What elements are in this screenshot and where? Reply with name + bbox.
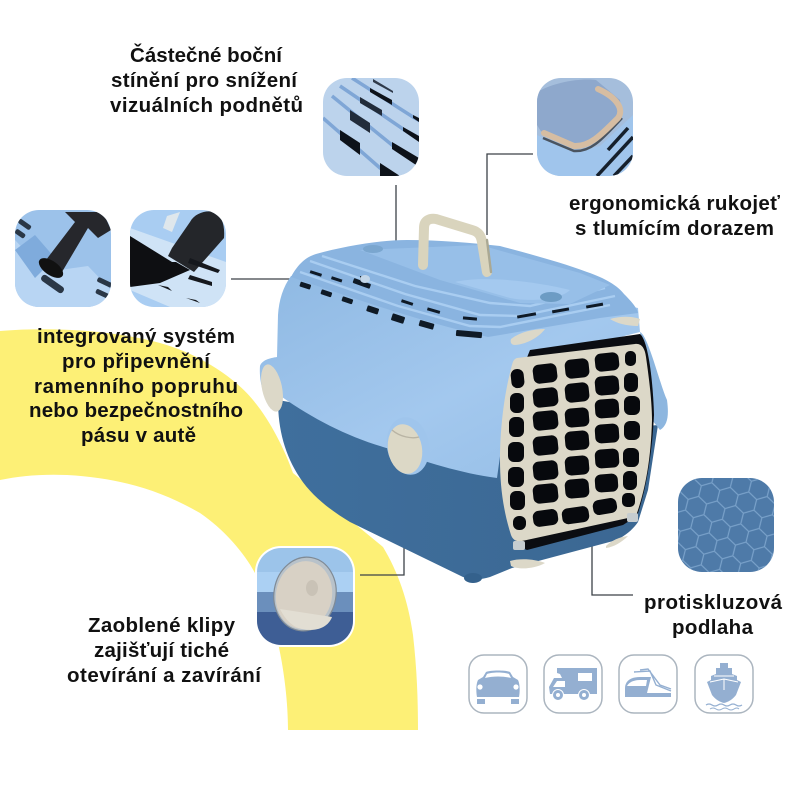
text: anti-slip floor: podlaha	[672, 616, 754, 639]
text: side shading	[110, 43, 303, 117]
text: anti-slip floor: protiskluzová	[644, 591, 783, 614]
text: integrated strap system: pásu v autě	[81, 424, 196, 447]
thumbnail: anti-slip floor	[678, 478, 774, 572]
front side clip	[382, 414, 434, 478]
text: ergonomic handle	[569, 192, 780, 240]
transport icon: camper	[544, 655, 602, 713]
thumbnail: strap through lid	[14, 210, 113, 307]
text: ergonomic handle: s tlumícím dorazem	[575, 217, 774, 240]
connector lines	[231, 154, 633, 595]
text: side shading: vizuálních podnětů	[110, 94, 303, 117]
thumbnail: strap over slots	[130, 210, 226, 307]
top strap clip	[360, 275, 370, 283]
yellow background arc	[0, 329, 418, 730]
transport icon: car	[469, 655, 527, 713]
lid ridges	[300, 256, 615, 327]
slots	[340, 79, 419, 177]
text: integrated strap system: pro připevnění	[62, 350, 211, 373]
text: integrated strap system: integrovaný systém	[37, 325, 235, 348]
door hinge tabs	[510, 317, 640, 568]
door opening	[510, 334, 654, 550]
text: anti-slip floor	[644, 591, 783, 639]
thumbnail: rounded clip	[255, 546, 355, 647]
text: side shading: Částečné boční	[130, 43, 283, 67]
thumbnail: handle	[537, 78, 633, 176]
thumbnail: side shading	[323, 78, 422, 178]
lid top surface	[291, 240, 638, 337]
door frame side	[640, 332, 668, 430]
text: rounded clips	[67, 614, 262, 687]
transport icon: ship	[695, 655, 753, 713]
text: rounded clips: Zaoblené klipy	[88, 614, 236, 637]
pet carrier	[257, 219, 668, 583]
transport icon: train	[619, 655, 677, 713]
vent rings	[540, 292, 562, 302]
carrier base	[278, 400, 658, 579]
text: integrated strap system: ramenního popruhu	[34, 375, 238, 398]
door holes	[508, 351, 640, 530]
carrier lid body	[260, 276, 640, 478]
text: side shading: stínění pro snížení	[111, 69, 298, 92]
text: ergonomic handle: ergonomická rukojeť	[569, 192, 780, 215]
text: rounded clips: zajišťují tiché	[94, 639, 229, 662]
handle	[423, 219, 491, 272]
lid inset panel	[455, 279, 570, 300]
grooves	[323, 78, 422, 178]
left side clip	[257, 362, 287, 414]
text: rounded clips: otevírání a zavírání	[67, 664, 262, 687]
lid centre recess	[360, 245, 610, 304]
door grille	[500, 344, 652, 541]
black slots	[299, 270, 603, 338]
text: integrated strap system: nebo bezpečnostního	[29, 399, 243, 422]
text: integrated strap system	[29, 325, 243, 447]
carrier foot	[464, 573, 482, 583]
